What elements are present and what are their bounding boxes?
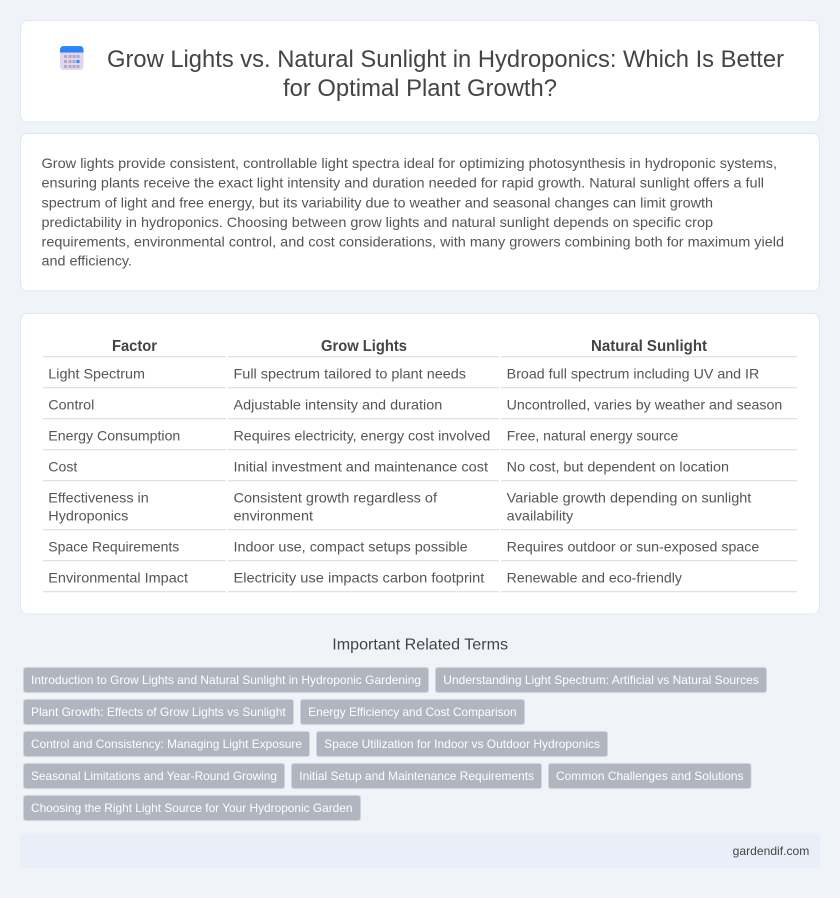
table row: environmental impact: Renewable and eco-friendly [507,569,682,585]
table row: light spectrum: Light Spectrum [48,365,145,381]
tag [300,700,524,724]
table row: effectiveness in hydroponics: Variable growth depending on sunlight [507,489,751,505]
table row: cost [43,458,797,481]
text block: introduction paragraph: requirements, environmental control, and cost considerations, with many growers combining both for maximum yield [42,234,784,250]
icon: calendar [60,46,84,70]
table header row: Factor [112,338,157,355]
panel: comparison table [20,314,820,614]
tag [316,732,608,756]
table row: cost: Cost [48,458,77,474]
table row: cost: Initial investment and maintenance cost [234,458,488,474]
tag [24,764,284,788]
table row: control: Uncontrolled, varies by weather and season [507,396,782,412]
tag: Seasonal Limitations and Year-Round Growing [31,769,277,783]
table row: environmental impact [43,569,797,592]
table row: space requirements [43,538,797,561]
text block: introduction paragraph: ensuring plants receive the exact light intensity and duration needed for rapid growth. Natural sunlight offers a full [42,174,764,190]
table row: environmental impact: Environmental Impact [48,569,188,585]
heading: title [107,46,784,102]
table row: energy consumption: Requires electricity, energy cost involved [234,427,490,443]
heading: important related terms: Important Related Terms [332,636,508,653]
tag: Plant Growth: Effects of Grow Lights vs Sunlight [31,705,286,719]
tag: Choosing the Right Light Source for Your Hydroponic Garden [31,801,352,815]
tag: Understanding Light Spectrum: Artificial vs Natural Sources [443,673,759,687]
tag: Common Challenges and Solutions [556,769,744,783]
tag [24,732,310,756]
table row: effectiveness in hydroponics: Consistent growth regardless of [234,489,437,505]
heading: title: for Optimal Plant Growth? [283,75,557,102]
panel: related term tags [24,668,766,820]
tag: Control and Consistency: Managing Light Exposure [31,737,302,751]
text block: introduction paragraph: spectrum of light and free energy, but its variability due to weather and seasonal changes can limit growth [42,194,713,210]
tag [24,668,428,692]
table row: effectiveness in hydroponics [43,489,797,530]
text block: introduction paragraph: and efficiency. [42,252,132,268]
table header row [43,338,797,357]
footer [20,834,820,868]
tag [24,796,360,820]
table row: space requirements: Indoor use, compact setups possible [234,538,468,554]
table row: energy consumption [43,427,797,450]
text block: introduction paragraph [42,155,784,268]
tag: Introduction to Grow Lights and Natural Sunlight in Hydroponic Gardening [31,673,421,687]
panel: title header [20,20,820,122]
tag: Initial Setup and Maintenance Requirements [299,769,534,783]
table row: effectiveness in hydroponics: Hydroponics [48,507,128,523]
text block: introduction paragraph: predictability in hydroponics. Choosing between grow lights and natural sunlight depends on specific crop [42,214,713,230]
table row: control: Control [48,396,94,412]
table row: space requirements: Space Requirements [48,538,179,554]
table row: light spectrum: Full spectrum tailored to plant needs [234,365,466,381]
table row: effectiveness in hydroponics: Effectiveness in [48,489,149,505]
footer: gardendif.com [733,844,809,858]
table row: space requirements: Requires outdoor or sun-exposed space [507,538,760,554]
table header row: Grow Lights [321,338,407,355]
table row: control [43,396,797,419]
tag [292,764,542,788]
table row: energy consumption: Energy Consumption [48,427,180,443]
table row: control: Adjustable intensity and duration [234,396,442,412]
panel: introduction [20,134,820,291]
table row: environmental impact: Electricity use impacts carbon footprint [234,569,484,585]
heading: title: Grow Lights vs. Natural Sunlight in Hydroponics: Which Is Better [107,46,784,73]
table row: effectiveness in hydroponics: availability [507,507,573,523]
tag [24,700,294,724]
table row: effectiveness in hydroponics: environment [234,507,313,523]
table row: energy consumption: Free, natural energy source [507,427,679,443]
table row: light spectrum [43,365,797,388]
table row: cost: No cost, but dependent on location [507,458,729,474]
table header row: Natural Sunlight [591,338,708,355]
tag [436,668,766,692]
text block: introduction paragraph: Grow lights provide consistent, controllable light spectra ideal for optimizing photosynthesis in hydroponic systems, [42,155,777,171]
tag: Space Utilization for Indoor vs Outdoor Hydroponics [324,737,600,751]
table row: light spectrum: Broad full spectrum including UV and IR [507,365,759,381]
tag: Energy Efficiency and Cost Comparison [308,705,517,719]
tag [548,764,751,788]
